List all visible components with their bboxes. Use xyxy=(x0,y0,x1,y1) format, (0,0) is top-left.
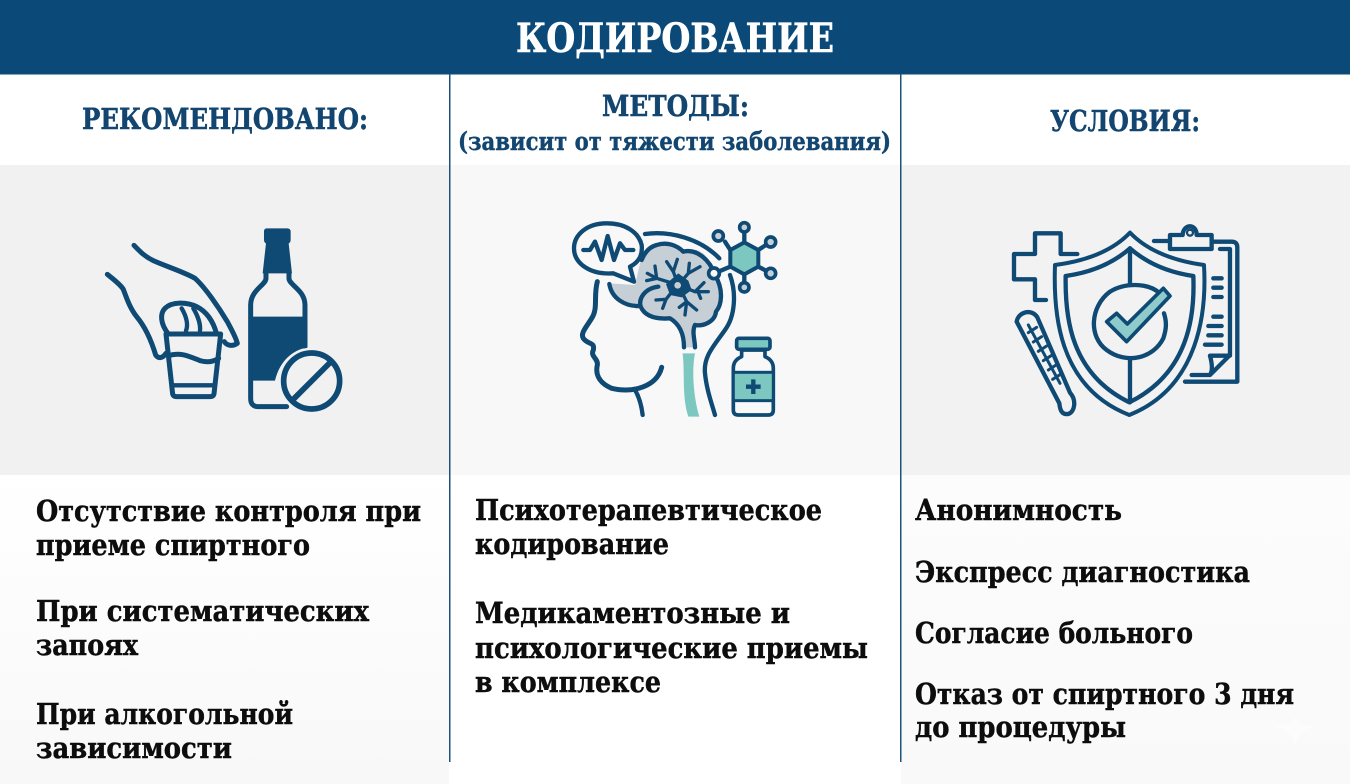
text block: recommended list: При систематических xyxy=(36,594,370,628)
icon: head with brain, molecule and medicine vial xyxy=(574,223,776,417)
text block: methods list xyxy=(475,493,868,699)
panel: recommended background xyxy=(0,165,449,784)
text block: methods list: Психотерапевтическое xyxy=(475,493,822,527)
heading: methods: МЕТОДЫ: xyxy=(602,89,749,123)
text block: recommended list: приеме спиртного xyxy=(36,528,310,562)
text block: conditions list: Согласие больного xyxy=(915,616,1193,650)
text block: recommended list: запоях xyxy=(36,628,139,662)
text block: recommended list: Отсутствие контроля при xyxy=(36,494,421,528)
heading: methods xyxy=(458,89,891,156)
text block: recommended list xyxy=(36,494,421,765)
text block: conditions list: Анонимность xyxy=(915,493,1122,527)
text block: methods list: психологические приемы xyxy=(475,631,868,665)
title banner xyxy=(0,0,1350,74)
icon: shield with check, cross, thermometer and clipboard xyxy=(1014,226,1237,415)
panel: methods background xyxy=(450,165,900,784)
heading: methods: (зависит от тяжести заболевания) xyxy=(458,127,891,156)
text block: conditions list xyxy=(915,493,1294,744)
neuron xyxy=(647,259,708,315)
column dividers xyxy=(449,74,902,762)
text block: methods list: Медикаментозные и xyxy=(475,596,790,630)
text block: conditions list: Экспресс диагностика xyxy=(915,555,1250,589)
text block: conditions list: до процедуры xyxy=(915,710,1126,744)
text block: recommended list: При алкогольной xyxy=(36,697,293,731)
text block: methods list: в комплексе xyxy=(475,665,661,699)
text block: methods list: кодирование xyxy=(475,527,669,561)
text block: conditions list: Отказ от спиртного 3 дня xyxy=(915,677,1294,711)
title banner: КОДИРОВАНИЕ xyxy=(516,15,834,62)
decorative sparkle mark xyxy=(1274,716,1316,746)
heading: conditions: УСЛОВИЯ: xyxy=(1050,104,1200,138)
text block: recommended list: зависимости xyxy=(36,731,232,765)
icon: hand with glass and crossed bottle xyxy=(107,228,345,414)
heading: recommended: РЕКОМЕНДОВАНО: xyxy=(82,102,368,136)
panel: conditions background xyxy=(901,165,1350,784)
